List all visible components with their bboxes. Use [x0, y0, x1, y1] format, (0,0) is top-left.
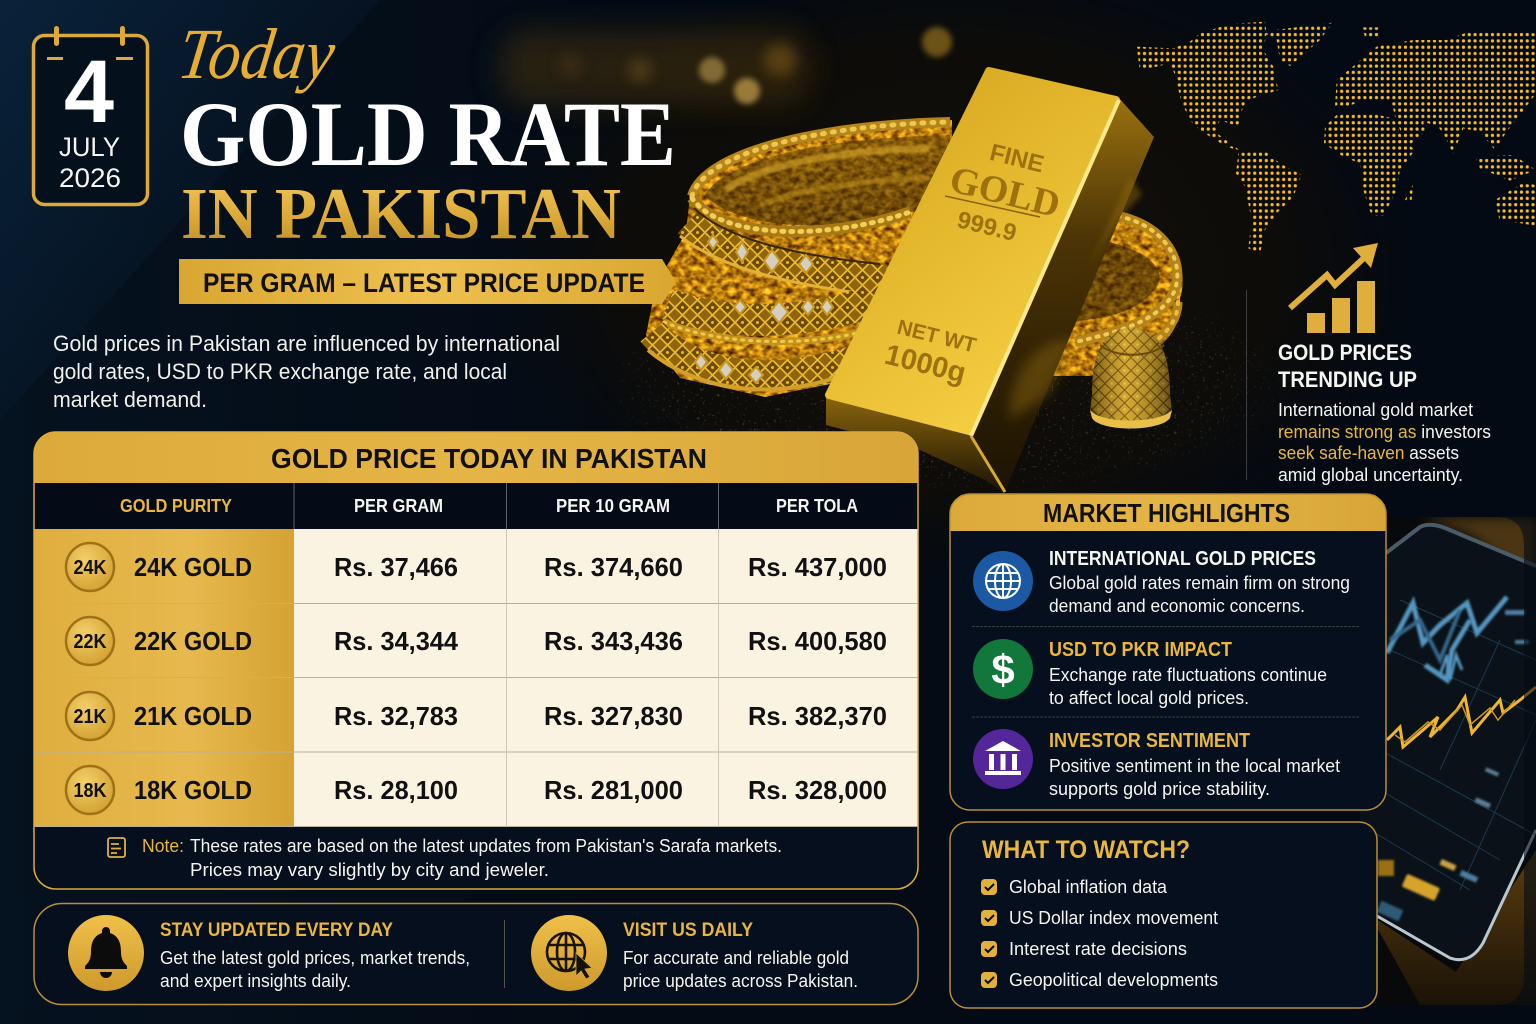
panel: market highlights [950, 494, 1386, 810]
title: Today [174, 14, 341, 94]
table heading: GOLD PRICE TODAY IN PAKISTAN [271, 443, 707, 474]
visit us text: VISIT US DAILY [623, 920, 753, 941]
item: usd to pkr impact: $ [991, 646, 1015, 693]
stay updated text: and expert insights daily. [160, 971, 351, 991]
intro paragraph: Gold prices in Pakistan are influenced by international [53, 331, 560, 356]
icon: globe with cursor [531, 915, 607, 991]
screen labels [1377, 610, 1529, 921]
title: GOLD RATE [180, 83, 676, 185]
table column headers: PER TOLA [776, 496, 858, 516]
item: international gold prices: Global gold rates remain firm on strong [1049, 573, 1350, 593]
visit us text [623, 920, 858, 991]
top beaded rim [692, 122, 950, 196]
trending text: remains strong as investors [1278, 422, 1491, 442]
row: 22K: 22K [74, 631, 107, 653]
bokeh lights [500, 27, 952, 105]
item: usd to pkr impact: Exchange rate fluctuations continue [1049, 665, 1327, 685]
row: 21K [66, 692, 887, 740]
table column headers [120, 483, 858, 529]
gold bar [826, 71, 1154, 493]
band 1 [688, 222, 885, 280]
row: 21K: 21K [74, 706, 107, 728]
calendar date badge [34, 26, 148, 204]
band 2 [668, 298, 880, 320]
note: Prices may vary slightly by city and jeweler. [190, 860, 549, 880]
item: international gold prices: INTERNATIONAL GOLD PRICES [1049, 548, 1316, 570]
row: 22K: Rs. 343,436 [544, 626, 683, 656]
band 3 [652, 332, 850, 375]
row: 21K: Rs. 382,370 [748, 701, 887, 731]
watch item 3: Interest rate decisions [1009, 939, 1187, 959]
intro paragraph: gold rates, USD to PKR exchange rate, and local [53, 359, 507, 384]
item: international gold prices: demand and economic concerns. [1049, 596, 1305, 616]
bar engraving: NET WT [895, 316, 979, 358]
table column headers: PER 10 GRAM [556, 496, 670, 516]
bar engraving [881, 139, 1064, 390]
row: 22K: 22K GOLD [134, 626, 252, 656]
gold jewellery: bangles [646, 120, 1183, 397]
icon: trending up chart [1290, 243, 1378, 333]
panel: stay updated and visit us [34, 904, 918, 1004]
icon: bell [68, 915, 144, 991]
background [0, 0, 1376, 554]
market highlights heading: MARKET HIGHLIGHTS [1043, 498, 1290, 528]
note: These rates are based on the latest updates from Pakistan's Sarafa markets. [190, 836, 782, 856]
title: IN PAKISTAN [181, 173, 621, 254]
item: usd to pkr impact [973, 639, 1327, 708]
row: 22K [66, 617, 887, 665]
row: 24K [66, 543, 887, 591]
item: investor sentiment: INVESTOR SENTIMENT [1049, 730, 1250, 752]
icon: note [108, 838, 125, 857]
calendar date badge: 2026 [59, 163, 121, 193]
intro paragraph [53, 331, 560, 412]
trending text: seek safe-haven assets [1278, 443, 1459, 463]
watch item 1: Global inflation data [1009, 877, 1168, 897]
intro paragraph: market demand. [53, 387, 207, 412]
row: 18K [66, 766, 887, 814]
row: 18K: 18K GOLD [134, 775, 252, 805]
row: 21K: 21K GOLD [134, 701, 252, 731]
bar front face [829, 71, 1116, 431]
gold chart line [1387, 687, 1536, 747]
stay updated text [160, 920, 470, 991]
thimble ornament [1090, 328, 1172, 428]
row: 24K: Rs. 374,660 [544, 552, 683, 582]
trending text: International gold market [1278, 400, 1473, 420]
calendar date badge: 4 [64, 41, 115, 141]
bar side face [969, 97, 1154, 493]
stay updated text: STAY UPDATED EVERY DAY [160, 920, 393, 941]
table heading [34, 432, 918, 483]
subtitle banner: PER GRAM – LATEST PRICE UPDATE [203, 268, 645, 298]
panel: gold price table [34, 432, 918, 889]
row: 21K: Rs. 32,783 [334, 701, 458, 731]
row: 24K: Rs. 37,466 [334, 552, 458, 582]
bar engraving: GOLD [946, 158, 1064, 226]
what to watch heading: WHAT TO WATCH? [982, 836, 1190, 864]
blue chart line [1387, 597, 1507, 653]
watch item 2: US Dollar index movement [1009, 908, 1218, 928]
stay updated text: Get the latest gold prices, market trends, [160, 948, 470, 968]
stones [695, 235, 833, 383]
phone frame [1386, 525, 1536, 566]
bar engraving: 1000g [881, 339, 969, 390]
note [108, 836, 782, 880]
panel: what to watch [950, 822, 1377, 1008]
title [174, 14, 676, 254]
item: investor sentiment: Positive sentiment in the local market [1049, 756, 1340, 776]
row: 18K: Rs. 28,100 [334, 775, 458, 805]
bar engraving: FINE [987, 139, 1047, 178]
subtitle banner [179, 259, 676, 304]
item: usd to pkr impact: to affect local gold prices. [1049, 688, 1249, 708]
chart grid [1370, 600, 1536, 890]
trending text: TRENDING UP [1278, 367, 1417, 392]
item: usd to pkr impact: USD TO PKR IMPACT [1049, 639, 1232, 661]
item: international gold prices [973, 548, 1350, 616]
row: 18K: Rs. 281,000 [544, 775, 683, 805]
phone with market chart [1372, 517, 1536, 1005]
row: 18K: Rs. 328,000 [748, 775, 887, 805]
row: 18K: 18K [74, 780, 107, 802]
row: 22K: Rs. 34,344 [334, 626, 459, 656]
trend divider [1246, 290, 1248, 480]
world map [1136, 22, 1535, 254]
phone screen [1360, 527, 1536, 958]
row: 24K: Rs. 437,000 [748, 552, 887, 582]
item: investor sentiment: supports gold price stability. [1049, 779, 1270, 799]
visit us text: price updates across Pakistan. [623, 971, 858, 991]
row: 22K: Rs. 400,580 [748, 626, 887, 656]
note: Note: [142, 836, 184, 856]
trending text: GOLD PRICES [1278, 340, 1412, 365]
table body background [34, 529, 918, 827]
trending text [1278, 340, 1491, 485]
table column headers: GOLD PURITY [120, 496, 232, 516]
watch item 4: Geopolitical developments [1009, 970, 1218, 990]
stacked bangles left [646, 120, 952, 397]
row: 24K: 24K GOLD [134, 552, 252, 582]
trending text: amid global uncertainty. [1278, 465, 1463, 485]
bar engraving: 999.9 [954, 206, 1019, 247]
row: 24K: 24K [74, 557, 107, 579]
calendar date badge: JULY [59, 132, 120, 162]
bar underside [826, 397, 1004, 493]
panel edge mask [1496, 517, 1536, 1005]
item: investor sentiment [973, 729, 1340, 799]
right bangles behind bar [1040, 212, 1183, 376]
table column headers: PER GRAM [354, 496, 443, 516]
row: 21K: Rs. 327,830 [544, 701, 683, 731]
visit us text: For accurate and reliable gold [623, 948, 849, 968]
